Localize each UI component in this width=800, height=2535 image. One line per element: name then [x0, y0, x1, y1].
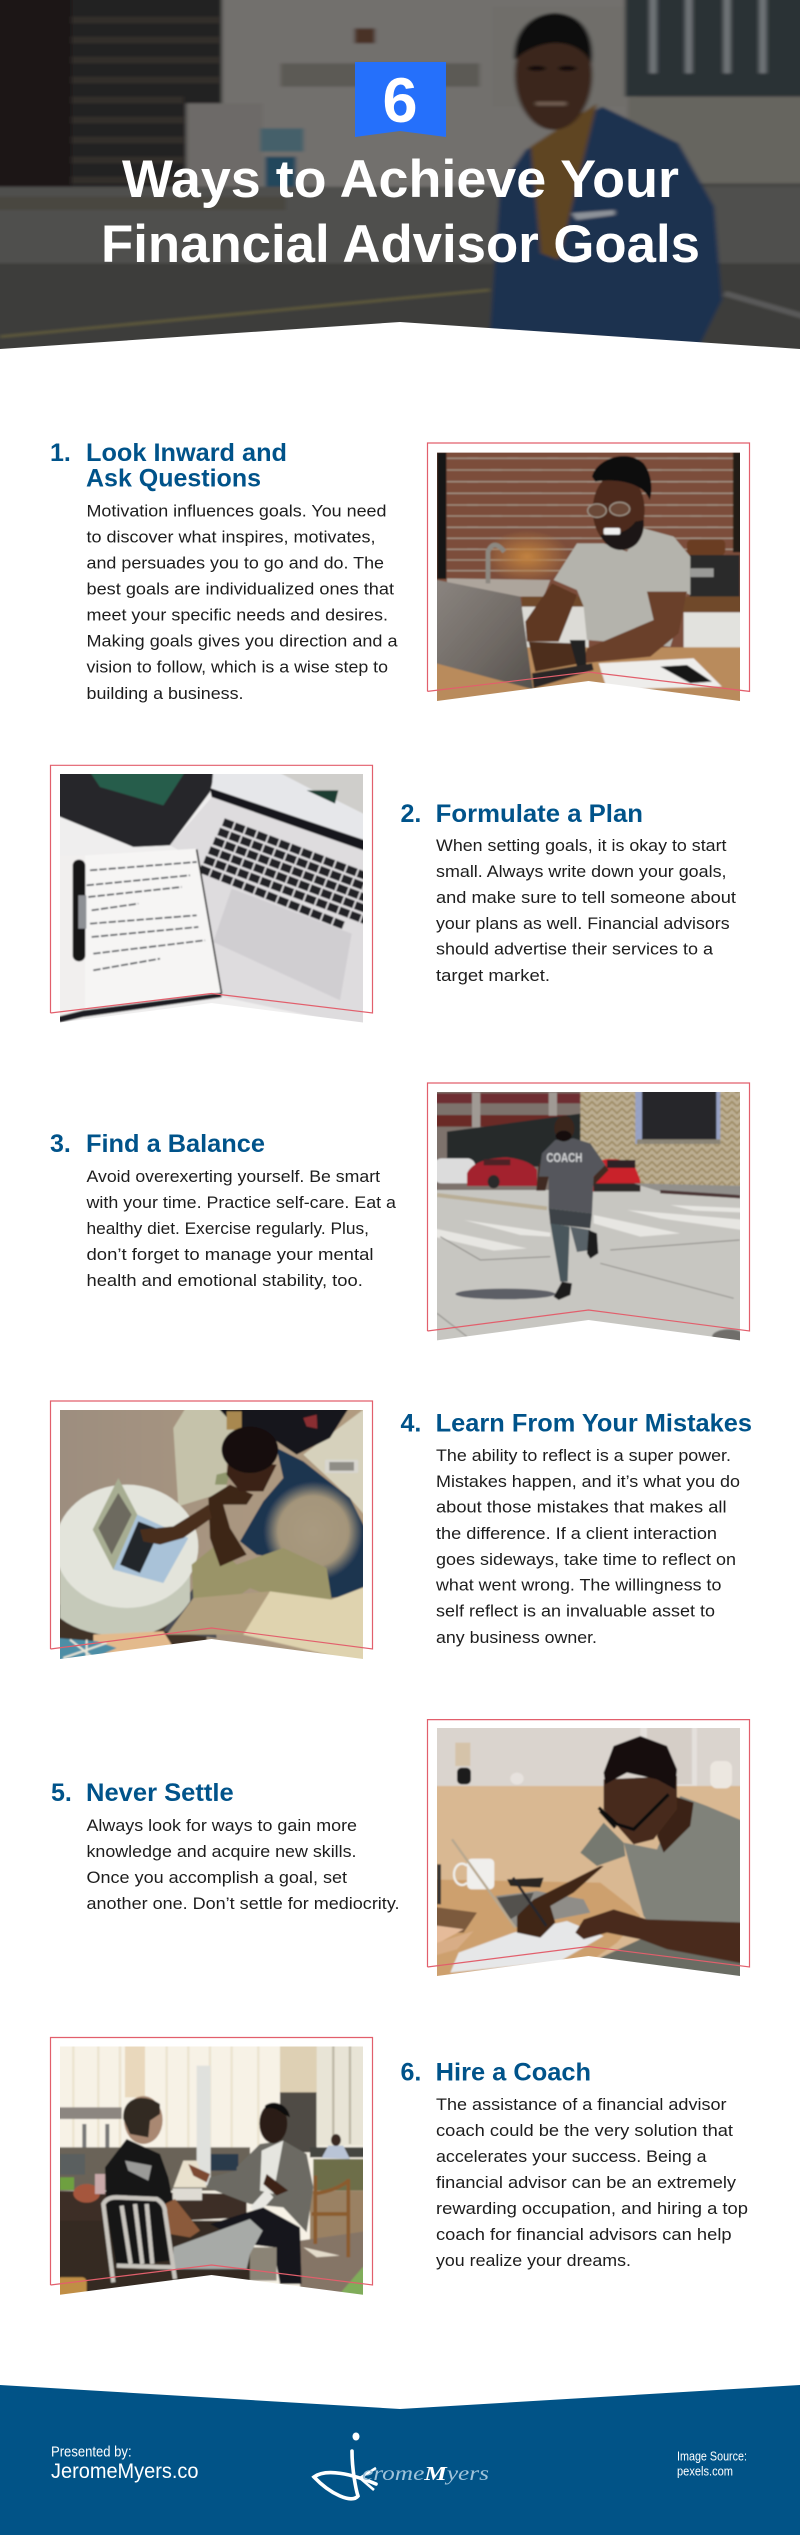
frame: photo 5 outline [428, 1720, 750, 1967]
text: presented by [51, 2444, 199, 2483]
text block: step 3 body: healthy diet. Exercise regularly. Plus, [86, 1219, 369, 1238]
photo: two men talking in office [60, 2046, 363, 2295]
heading: step 6: 6. [400, 2058, 421, 2086]
text block: step 5 body [86, 1816, 400, 1913]
text block: step 4 body: what went wrong. The willingness to [435, 1576, 721, 1595]
heading: step 6: Hire a Coach [436, 2058, 591, 2086]
text block: step 1 body: building a business. [86, 684, 244, 703]
text block: step 6 body: coach for financial advisors can help [436, 2225, 732, 2244]
photo: man writing on paper [437, 1728, 740, 1976]
text block: step 4 body: The ability to reflect is a super power. [436, 1446, 731, 1465]
panel: header photo banner [0, 0, 800, 387]
text block: step 4 body: the difference. If a client interaction [436, 1524, 717, 1543]
text block: step 2 body: When setting goals, it is okay to start [436, 836, 727, 855]
frame: photo 1 outline [428, 443, 750, 691]
panel: step 3 text [50, 1130, 397, 1290]
title: Ways to Achieve Your [122, 150, 679, 209]
text block: step 4 body: Mistakes happen, and it’s what you do [436, 1472, 740, 1491]
text block: step 6 body: financial advisor can be an extremely [436, 2173, 737, 2192]
heading: step 2: 2. [400, 800, 421, 828]
text block: step 1 body: best goals are individualized ones that [86, 580, 394, 599]
text block: step 1 body [86, 501, 398, 703]
text block: step 6 body: rewarding occupation, and hiring a top [436, 2199, 748, 2218]
text block: step 3 body: Avoid overexerting yourself. Be smart [86, 1167, 380, 1186]
frame: photo 2 outline [50, 765, 372, 1013]
photo: notebook and laptop [60, 774, 363, 1022]
text block: step 1 body: to discover what inspires, motivates, [86, 527, 375, 546]
text: presented by: Presented by: [51, 2444, 132, 2461]
photo: man running across street [437, 1092, 740, 1340]
text block: step 4 body: self reflect is an invaluable asset to [436, 1602, 715, 1621]
text block: step 1 body: Motivation influences goals. You need [86, 501, 386, 520]
photo: man running across street: COACH [546, 1151, 582, 1165]
text block: step 5 body: Once you accomplish a goal, set [86, 1868, 347, 1887]
heading: step 1: 1. [50, 439, 71, 467]
photo: man smiling at laptop [437, 452, 740, 701]
text block: step 1 body: Making goals gives you direction and a [86, 632, 398, 650]
logo: Jerome Myers signature [314, 2432, 489, 2499]
panel: step 1 text [50, 439, 398, 703]
title [101, 150, 700, 274]
text block: step 2 body [436, 836, 736, 985]
text block: step 4 body [435, 1446, 740, 1647]
text: image source [677, 2450, 747, 2479]
heading: step 1: Look Inward and [86, 439, 287, 467]
text block: step 4 body: any business owner. [436, 1628, 597, 1647]
text block: step 5 body: Always look for ways to gain more [86, 1816, 357, 1835]
text block: step 6 body: The assistance of a financial advisor [436, 2095, 727, 2114]
frame: photo 6 outline [50, 2038, 372, 2285]
text block: step 2 body: small. Always write down your goals, [436, 862, 726, 881]
heading: step 4: 4. [400, 1409, 421, 1437]
text block: step 5 body: another one. Don’t settle for mediocrity. [86, 1894, 400, 1913]
heading: step 3: 3. [50, 1130, 71, 1158]
heading: step 5: 5. [51, 1779, 72, 1807]
frame: photo 4 outline [50, 1401, 372, 1649]
text block: step 2 body: target market. [436, 966, 550, 985]
badge: number 6: 6 [382, 66, 418, 136]
logo: Jerome Myers signature: erome Myers [362, 2463, 489, 2485]
text block: step 6 body: coach could be the very solution that [436, 2121, 733, 2140]
panel: footer [0, 2385, 800, 2535]
text block: step 3 body: with your time. Practice self-care. Eat a [85, 1193, 397, 1212]
heading: step 1 [50, 439, 287, 492]
text block: step 6 body: you realize your dreams. [436, 2251, 631, 2270]
text block: step 6 body: accelerates your success. Being a [436, 2147, 707, 2166]
text block: step 2 body: your plans as well. Financial advisors [436, 914, 730, 933]
text block: step 1 body: and persuades you to go and do. The [86, 554, 384, 573]
text block: step 2 body: and make sure to tell someone about [436, 888, 736, 907]
text block: step 3 body: don’t forget to manage your mental [86, 1245, 374, 1264]
heading: step 2: Formulate a Plan [436, 800, 643, 828]
heading: step 1: Ask Questions [86, 464, 261, 492]
frame: photo 3 outline [428, 1083, 750, 1331]
panel: step 6 text [400, 2058, 748, 2270]
text block: step 4 body: goes sideways, take time to reflect on [436, 1550, 736, 1569]
panel: step 5 text [51, 1779, 400, 1913]
text block: step 6 body [436, 2095, 748, 2270]
heading: step 3: Find a Balance [86, 1130, 265, 1158]
text: image source: Image Source: [677, 2450, 747, 2464]
text block: step 2 body: should advertise their services to a [436, 940, 714, 959]
panel: step 2 text [400, 800, 736, 985]
text block: step 1 body: vision to follow, which is a wise step to [86, 658, 388, 677]
text block: step 5 body: knowledge and acquire new skills. [86, 1842, 356, 1861]
text: image source: pexels.com [677, 2465, 733, 2479]
text: presented by: JeromeMyers.co [51, 2459, 199, 2483]
text block: step 3 body [85, 1167, 397, 1290]
heading: step 4: Learn From Your Mistakes [436, 1409, 752, 1437]
photo: man seated at round table with laptop [60, 1410, 363, 1659]
badge: number 6 [355, 62, 446, 137]
panel: step 4 text [400, 1409, 752, 1647]
heading: step 5: Never Settle [86, 1779, 234, 1807]
text block: step 4 body: about those mistakes that makes all [436, 1498, 726, 1517]
text block: step 3 body: health and emotional stability, too. [86, 1271, 363, 1290]
title: Financial Advisor Goals [101, 215, 700, 274]
text block: step 1 body: meet your specific needs and desires. [86, 605, 388, 624]
